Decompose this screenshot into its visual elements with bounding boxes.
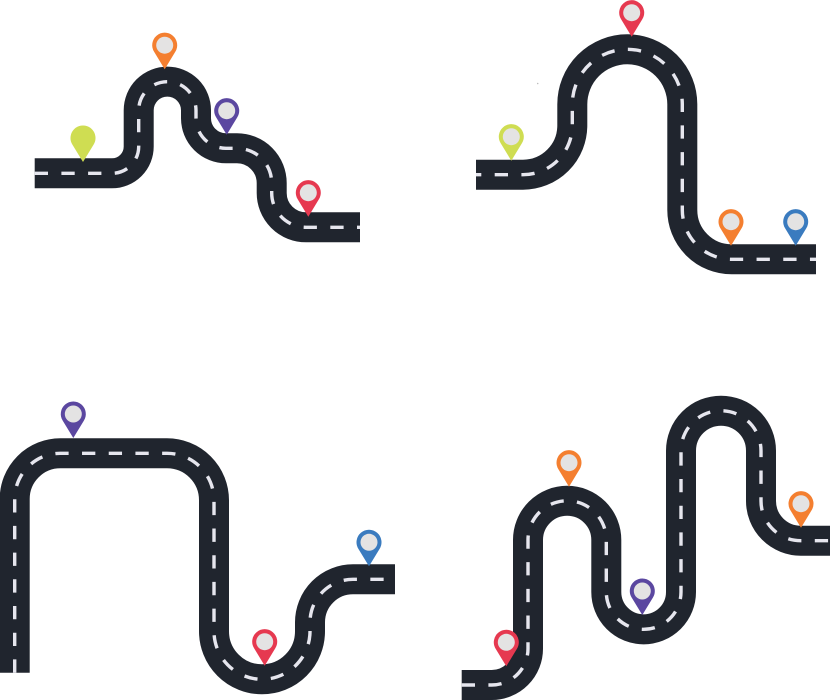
pin: red, road 1 <box>296 180 321 217</box>
road 3: bottom left <box>15 453 395 679</box>
speck near road 2 <box>537 83 538 84</box>
pin: blue, road 3 <box>356 530 382 566</box>
pin: purple, road 1 <box>214 98 239 135</box>
pin: purple, road 3 <box>61 401 86 438</box>
pin: blue, road 2 <box>783 209 808 246</box>
road 1: top left <box>35 82 360 227</box>
pin: lime, road 1 <box>70 125 96 162</box>
pin: purple, road 4 <box>630 578 655 615</box>
pin: red, road 3 <box>252 629 277 666</box>
road 4: bottom right <box>462 411 830 685</box>
pin: orange, road 4 upper left <box>556 450 582 487</box>
pin: red, road 4 <box>494 630 519 666</box>
pin: red, road 2 <box>619 0 644 37</box>
pin: orange, road 1 <box>152 33 177 69</box>
road 2: top right <box>476 49 816 259</box>
pin: lime, road 2 <box>499 124 524 161</box>
pin: orange, road 2 <box>718 209 744 246</box>
pin: orange, road 4 right <box>788 491 814 528</box>
